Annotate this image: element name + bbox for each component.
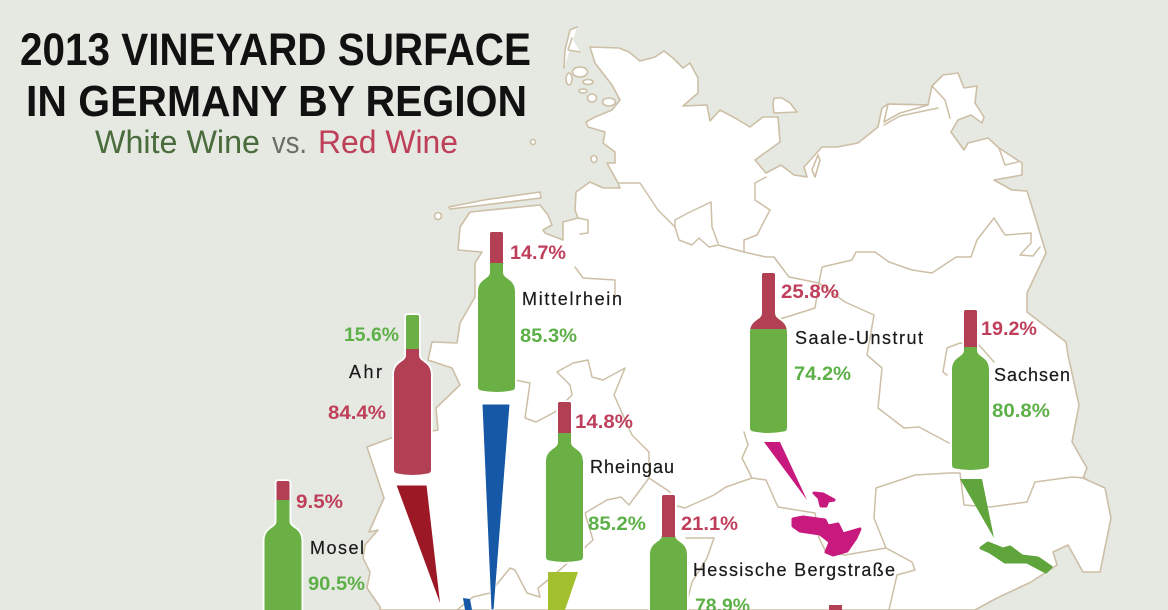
region shape: Sachsen	[981, 543, 1051, 572]
label: Ahr: Ahr	[349, 362, 382, 382]
label: Rheingau: 14.8%	[575, 411, 633, 433]
label: Mosel: Mosel	[310, 538, 364, 558]
wedge: Saale-Unstrut	[764, 442, 807, 500]
label: Rheingau: 85.2%	[588, 513, 646, 535]
bottle: Rheingau	[546, 402, 584, 564]
subtitle: vs.	[272, 125, 307, 160]
bottle: partially visible red wine region	[829, 605, 842, 610]
label: Saale-Unstrut: 74.2%	[794, 363, 851, 385]
label: Mittelrhein	[510, 242, 622, 347]
label: Sachsen: 19.2%	[981, 318, 1037, 340]
label: Ahr: 15.6%	[344, 324, 399, 346]
wedge: Ahr	[396, 485, 441, 607]
label: Mosel: 90.5%	[308, 573, 365, 595]
bottle: Mittelrhein	[478, 232, 516, 394]
map of Germany	[363, 27, 1111, 610]
label: Mittelrhein: Mittelrhein	[522, 289, 622, 309]
label: Hessische Bergstraße: 21.1%	[681, 513, 738, 535]
label: Rheingau: Rheingau	[590, 457, 674, 477]
state borders	[457, 86, 1085, 610]
label: Sachsen	[981, 318, 1070, 422]
bottle: Hessische Bergstraße	[650, 495, 688, 610]
label: Ahr	[328, 324, 399, 424]
bottle: Saale-Unstrut	[750, 273, 788, 435]
wedge: Sachsen	[960, 479, 994, 538]
bottle: Mosel	[264, 481, 302, 610]
map outline	[363, 47, 1111, 610]
bottle: Ahr	[394, 315, 432, 477]
subtitle: White Wine	[95, 124, 260, 160]
label: Mittelrhein: 85.3%	[520, 325, 577, 347]
label: Sachsen: 80.8%	[992, 400, 1050, 422]
wedge: Rheingau	[548, 572, 578, 610]
subtitle: Red Wine	[318, 124, 458, 160]
label: Sachsen: Sachsen	[994, 365, 1070, 385]
label: Mittelrhein: 14.7%	[510, 242, 566, 264]
label: Mosel	[296, 491, 365, 595]
subtitle	[95, 124, 458, 160]
label: Saale-Unstrut: Saale-Unstrut	[795, 328, 923, 348]
title: 2013 VINEYARD SURFACE	[20, 24, 531, 75]
region shape: Saale-Unstrut	[793, 493, 860, 555]
region shape: Mittelrhein	[463, 598, 472, 610]
label: Saale-Unstrut	[781, 281, 923, 385]
label: Saale-Unstrut: 25.8%	[781, 281, 839, 303]
bottle: Sachsen	[952, 310, 990, 472]
label: Hessische Bergstraße	[681, 513, 895, 610]
label: Rheingau	[575, 411, 674, 535]
title	[20, 24, 531, 126]
label: Mosel: 9.5%	[296, 491, 343, 513]
label: Ahr: 84.4%	[328, 402, 386, 424]
title: IN GERMANY BY REGION	[26, 77, 527, 126]
wedge: Mittelrhein	[482, 404, 510, 610]
label: Hessische Bergstraße: Hessische Bergstraße	[693, 560, 895, 580]
North Sea and Baltic islands	[434, 27, 928, 220]
